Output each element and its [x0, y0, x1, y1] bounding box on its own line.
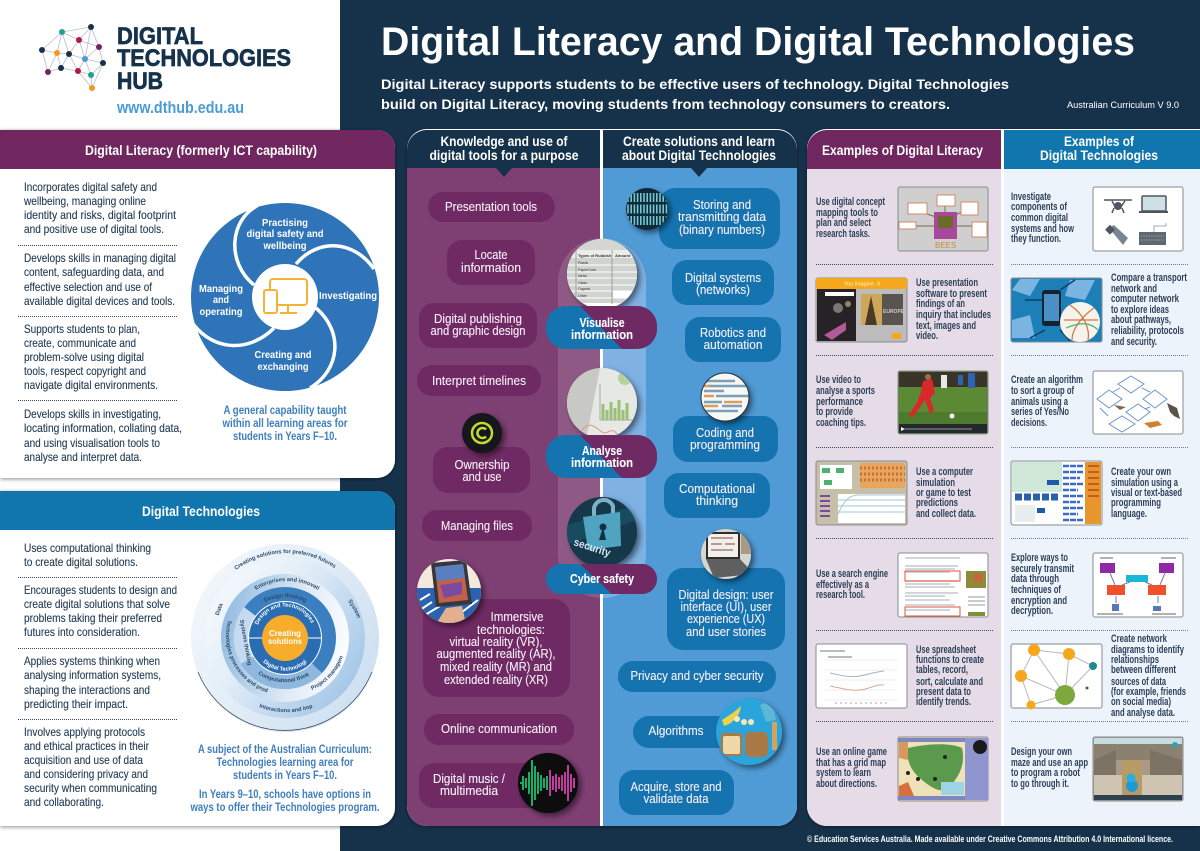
text block: digital technologies points: Encourages students to design and: [24, 583, 177, 597]
pill: Analyse information: information: [571, 456, 633, 470]
image: presentation tool: [816, 278, 907, 342]
pill: Immersive technologies: augmented reality (AR),: [436, 647, 556, 661]
pill: Analyse information: [546, 435, 657, 478]
pill: Storing and transmitting data: [659, 188, 780, 249]
heading: create solutions: [622, 133, 776, 163]
swirl labels: and: [213, 294, 229, 306]
pill: Computational thinking: thinking: [696, 494, 738, 508]
example: transport and computer networks: and security.: [1111, 336, 1157, 348]
pill: Digital publishing: Digital publishing: [434, 312, 522, 326]
pill: Digital music: multimedia: [440, 784, 498, 798]
caption: general capability: within all learning areas for: [222, 416, 348, 430]
heading: knowledge and use: Knowledge and use of: [440, 133, 568, 149]
example: robot maze: Design your own: [1011, 746, 1072, 758]
pill: Digital design: and user stories: [686, 625, 766, 639]
pill: Storing and transmitting data: transmitting data: [678, 210, 766, 224]
heading: Examples of Digital Literacy: [807, 130, 1001, 169]
ring labels: Enterprises and innovation: [254, 578, 320, 590]
swirl labels: Investigating: [319, 290, 377, 302]
pill: Computational thinking: Computational: [679, 482, 755, 496]
pill: Digital music: [419, 763, 544, 808]
pill: Robotics and automation: [685, 317, 781, 362]
text block: digital literacy points: effective selection and use of: [24, 280, 153, 294]
example: network diagrams: relationships: [1111, 654, 1159, 666]
ring labels: Digital Technologies: [263, 659, 307, 671]
pill: Ownership and use: and use: [462, 470, 502, 484]
pill: Locate information: Locate: [474, 248, 508, 262]
example: spreadsheet trends: identify trends.: [916, 696, 971, 708]
example: online grid map game: [816, 737, 988, 801]
pill: Digital systems: [672, 260, 774, 305]
example: computer simulation: simulation: [916, 477, 955, 489]
photo: spreadsheet: Glass: [578, 281, 587, 285]
text block: digital literacy points: Incorporates digital safety and: [24, 180, 157, 194]
pill: Immersive technologies: extended reality (XR): [444, 673, 548, 687]
text block: digital literacy points: identity and risks, digital footprint: [24, 208, 177, 222]
example: presentation software: text, images and: [916, 320, 976, 332]
image: bees concept map: [898, 187, 988, 251]
pill: Presentation tools: [428, 192, 555, 222]
image: search results page: [898, 553, 988, 617]
pill: Coding and programming: [673, 416, 778, 462]
example: sorting algorithm: Create an algorithm: [1011, 374, 1083, 386]
caption: subject of the Australian Curriculum: Technologies learning area for: [216, 755, 354, 769]
example: search engine: research tool.: [816, 589, 865, 601]
example: robot maze: [1011, 737, 1183, 801]
caption: subject of the Australian Curriculum: A subject of the Australian Curriculum:: [198, 742, 372, 756]
example: spreadsheet trends: sort, calculate and: [916, 676, 983, 688]
pill: Analyse information: Analyse: [582, 444, 622, 458]
example: spreadsheet trends: Use spreadsheet: [916, 644, 976, 656]
photo: source code: [701, 373, 750, 421]
photo: sound waveform: [518, 753, 578, 813]
example: sports video: coaching tips.: [816, 417, 866, 429]
photo: spreadsheet: Organic: [578, 287, 591, 291]
image: bees concept map: BEES: [935, 241, 956, 250]
logo wordmark: TECHNOLOGIES: [117, 45, 291, 72]
photo: spreadsheet: Types of Rubbish: [578, 253, 612, 258]
pill: Immersive technologies: mixed reality (MR) and: [440, 660, 552, 674]
pill: Acquire, store and validate data: Acquire, store and: [630, 780, 722, 794]
text block: digital literacy points: problem-solve using digital: [24, 350, 144, 364]
logo URL: www.dthub.edu.au: [116, 98, 244, 117]
example: network diagrams: and analyse data.: [1111, 707, 1175, 719]
image: grid map: [898, 737, 988, 801]
pill: Digital design: interface (UI), user: [680, 600, 772, 614]
image: spreadsheet line chart: [816, 644, 907, 708]
image: presentation tool: You imagine. It: [844, 282, 881, 288]
text block: digital literacy points: and positive use of digital tools.: [24, 222, 164, 236]
pill: Digital systems: Digital systems: [685, 271, 761, 285]
pill: Visualise information: [546, 306, 657, 349]
heading: create solutions: about Digital Technologies: [622, 147, 776, 163]
text block: digital literacy points: content, safeguarding data, and: [24, 265, 164, 279]
pill: Locate information: information: [461, 261, 521, 275]
example: computer simulation: predictions: [916, 497, 958, 509]
example: computer simulation: [816, 461, 976, 525]
example: concept mapping: research tasks.: [816, 228, 870, 240]
example: transport and computer networks: [1011, 272, 1187, 348]
example: computer simulation: Use a computer: [916, 466, 973, 478]
heading: Examples of Digital Technologies: Examples of: [1064, 133, 1134, 149]
pill: Robotics and automation: Robotics and: [700, 326, 766, 340]
pill: Robotics and automation: automation: [704, 338, 763, 352]
example: robot maze: to go through it.: [1011, 778, 1069, 790]
image: visual programming screen: [1011, 461, 1102, 525]
swirl labels: digital safety and: [246, 228, 324, 240]
example: encryption: securely transmit: [1011, 563, 1074, 575]
text block: digital technologies points: Applies systems thinking when: [24, 654, 160, 668]
logo wordmark: HUB: [117, 68, 163, 95]
pill: Coding and programming: programming: [690, 438, 760, 452]
example: online grid map game: system to learn: [816, 767, 871, 779]
ring labels: Technologies processes and production: [226, 620, 268, 692]
ring labels: Systems thinking: [238, 619, 252, 667]
pill: Digital publishing: [419, 303, 537, 348]
pill: Interpret timelines: [417, 365, 541, 396]
example: online grid map game: about directions.: [816, 778, 877, 790]
chart: digital literacy swirl: [191, 203, 379, 391]
text block: digital technologies points: [18, 541, 177, 809]
photo: spreadsheet: Metal: [578, 274, 587, 278]
text block: digital literacy points: [18, 180, 182, 464]
example: sorting algorithm: animals using a: [1011, 396, 1069, 408]
example: spreadsheet trends: present data to: [916, 686, 971, 698]
photo: spreadsheet: Amount: [615, 253, 631, 258]
text block: digital technologies points: Uses computational thinking: [24, 541, 151, 555]
pill: Ownership and use: [433, 447, 530, 493]
divider between columns: [600, 129, 603, 826]
photo: spreadsheet: Paper/Card: [578, 268, 596, 272]
text block: digital technologies points: analysing information systems,: [24, 668, 161, 682]
caption: subject of the Australian Curriculum: [190, 742, 380, 814]
example: digital system components: [1011, 187, 1183, 251]
example: sorting algorithm: decisions.: [1011, 417, 1047, 429]
photo: binary digits: [624, 188, 670, 230]
curriculum version note: Australian Curriculum V 9.0: [1067, 100, 1179, 110]
pill: Storing and transmitting data: Storing and: [693, 198, 751, 212]
text block: digital technologies points: shaping the interactions and: [24, 683, 150, 697]
example: encryption: techniques of: [1011, 584, 1061, 596]
icon: computer and phone: [264, 279, 307, 313]
image: simulation graphs: [816, 461, 907, 525]
example: presentation software: software to present: [916, 288, 987, 300]
pill: Managing files: Managing files: [441, 519, 513, 533]
example: presentation software: video.: [916, 330, 938, 342]
example: presentation software: findings of an: [916, 298, 965, 310]
core label: Creating solutions: [268, 628, 302, 646]
subtitle: Digital Literacy supports students to be effective users of technology. Digital Technologies: [381, 76, 1009, 92]
heading: Examples of Digital Technologies: [1004, 130, 1200, 169]
pill: Visualise information: Visualise: [580, 316, 625, 330]
example: network diagrams: between different: [1111, 664, 1176, 676]
pill: Online communication: Online communication: [441, 722, 557, 736]
panel: Digital Literacy: [0, 130, 395, 478]
example: concept mapping: Use digital concept: [816, 196, 885, 208]
example: presentation software: [816, 277, 991, 342]
text block: digital technologies points: security when communicating: [24, 781, 157, 795]
icon: network map of Australia: [39, 24, 106, 91]
pill: Algorithms: Algorithms: [648, 724, 704, 738]
example: presentation software: Use presentation: [916, 277, 978, 289]
image: soccer player video still: [898, 371, 988, 434]
text block: digital technologies points: futures into consideration.: [24, 625, 140, 639]
example: sports video: [816, 371, 988, 434]
example: encryption: Explore ways to: [1011, 552, 1068, 564]
pill: Managing files: [422, 510, 532, 541]
text block: digital literacy points: analyse and interpret data.: [24, 450, 142, 464]
text block: digital technologies points: Involves applying protocols: [24, 725, 145, 739]
swirl labels: exchanging: [258, 361, 308, 373]
example: digital system components: systems and how: [1011, 223, 1074, 235]
pill: Immersive technologies: technologies:: [477, 623, 545, 637]
title: Digital Literacy and Digital Technologies: [381, 20, 1135, 64]
swirl labels: wellbeing: [263, 240, 306, 252]
pill: Digital design: experience (UX): [687, 612, 765, 626]
photo: tablet augmented reality: [417, 559, 481, 624]
example: transport and computer networks: about pathways,: [1111, 314, 1171, 326]
pill: Digital systems: (networks): [696, 283, 750, 297]
ring labels: [215, 549, 360, 712]
text block: digital literacy points: Develops skills in investigating,: [24, 407, 161, 421]
heading: Examples of Digital Technologies: Digital Technologies: [1040, 147, 1158, 163]
swirl labels: Managing: [199, 283, 243, 295]
example: transport and computer networks: network and: [1111, 283, 1157, 295]
text block: digital technologies points: and collaborating.: [24, 795, 104, 809]
pill: Ownership and use: Ownership: [454, 458, 510, 472]
subtitle: [381, 76, 1009, 112]
pill: Digital music: Digital music /: [433, 772, 505, 786]
ring labels: Project management: [310, 656, 343, 690]
pill: Cyber safety: [546, 564, 657, 594]
text block: digital literacy points: available digital devices and tools.: [24, 294, 175, 308]
text block: digital technologies points: problems taking their preferred: [24, 611, 162, 625]
text block: digital literacy points: wellbeing, managing online: [23, 194, 146, 208]
example: concept mapping: [816, 187, 988, 251]
swirl labels: [199, 217, 377, 373]
text block: digital technologies points: to create digital solutions.: [24, 555, 138, 569]
photo: security padlock: [567, 497, 637, 567]
pill: Digital design: [667, 568, 785, 650]
photo: spreadsheet: Plastic: [578, 261, 589, 265]
pill: Visualise information: information: [571, 328, 633, 342]
column: Examples of Digital Literacy: [807, 130, 1001, 826]
example: encryption: data through: [1011, 573, 1059, 585]
logo wordmark: DIGITAL: [117, 23, 203, 50]
text block: digital technologies points: and considering privacy and: [24, 767, 148, 781]
photo: laptop: [701, 529, 754, 579]
example: computer simulation: and collect data.: [916, 508, 976, 520]
heading: create solutions: Create solutions and learn: [623, 133, 775, 149]
example: concept mapping: mapping tools to: [816, 207, 878, 219]
example: sorting algorithm: [1011, 371, 1183, 434]
panel: examples: [807, 129, 1200, 826]
example: sports video: analyse a sports: [816, 385, 875, 397]
caption: subject of the Australian Curriculum: students in Years F–10.: [233, 768, 337, 782]
heading: knowledge and use: digital tools for a purpose: [430, 147, 579, 163]
core label: Creating solutions: solutions: [268, 636, 302, 646]
photo: security padlock: security: [572, 536, 613, 560]
example: search engine: Use a search engine: [816, 568, 888, 580]
pill: Immersive technologies: [423, 599, 570, 697]
heading: Examples of Digital Literacy: Examples of Digital Literacy: [822, 142, 983, 158]
example: concept mapping: plan and select: [816, 217, 871, 229]
image: presentation tool: EUROPE: [883, 309, 905, 315]
text block: digital literacy points: tools, respect copyright and: [24, 364, 146, 378]
caption: general capability: A general capability taught: [224, 403, 346, 417]
example: online grid map game: that has a grid map: [816, 757, 886, 769]
ring labels: Design thinking: [264, 593, 306, 603]
pill: Immersive technologies: Immersive: [490, 610, 544, 624]
ring labels: Design and Technologies: [254, 602, 314, 625]
pill: Digital publishing: and graphic design: [430, 324, 526, 338]
image: drone, laptop, USB, keyboard: [1093, 187, 1183, 251]
pill: Coding and programming: Coding and: [696, 426, 754, 440]
pill: Locate information: [447, 240, 535, 285]
example: sports video: performance: [816, 396, 863, 408]
logo wordmark: [117, 23, 291, 95]
example: network diagrams: sources of data: [1111, 676, 1167, 688]
example: network diagrams: Create network: [1111, 633, 1168, 645]
caption: general capability: students in Years F–10.: [233, 429, 337, 443]
example: digital system components: common digital: [1011, 212, 1068, 224]
text block: digital technologies points: create digital solutions that solve: [24, 597, 170, 611]
heading: Digital Technologies: Digital Technologies: [142, 503, 260, 519]
heading: Digital Literacy: [0, 130, 395, 169]
pill: Storing and transmitting data: (binary numbers): [679, 223, 765, 237]
pill: Cyber safety: Cyber safety: [570, 572, 634, 586]
image: phone and transit map: [1011, 278, 1102, 342]
ring labels: Data: [215, 602, 225, 616]
photo: spreadsheet: [567, 239, 637, 309]
text block: digital literacy points: Develops skills in managing digital: [24, 251, 176, 265]
ring labels: Systems: [348, 600, 360, 618]
text block: digital literacy points: navigate digital environments.: [24, 378, 158, 392]
caption: subject of the Australian Curriculum: In Years 9–10, schools have options in: [199, 787, 371, 801]
example: spreadsheet trends: functions to create: [916, 654, 984, 666]
text block: digital literacy points: and using visualisation tools to: [24, 436, 160, 450]
swirl labels: Creating and: [254, 349, 312, 361]
example: transport and computer networks: to explore ideas: [1111, 304, 1169, 316]
text block: digital technologies points: predicting their impact.: [24, 697, 128, 711]
example: digital system components: components of: [1011, 201, 1067, 213]
chart: concentric curriculum diagram: [191, 544, 379, 732]
photo: sandwich ingredients: [716, 699, 782, 765]
image: decision flowchart: [1093, 371, 1183, 434]
text block: digital literacy points: Supports students to plan,: [24, 322, 140, 336]
image: robot in a maze: [1093, 737, 1183, 801]
example: network diagrams: [1011, 633, 1186, 719]
column divider: [1001, 130, 1004, 826]
example: create a simulation: programming: [1111, 497, 1161, 509]
text block: digital literacy points: create, communicate and: [24, 336, 136, 350]
swirl labels: Practising: [262, 217, 308, 229]
example: encryption: decryption.: [1011, 605, 1053, 617]
example: sorting algorithm: series of Yes/No: [1011, 406, 1069, 418]
ring labels: Interactions and impact: [259, 704, 312, 712]
example: online grid map game: Use an online game: [816, 746, 887, 758]
swirl labels: operating: [200, 306, 242, 318]
example: network diagrams: on social media): [1111, 696, 1171, 708]
image: encryption flow diagram: [1093, 553, 1183, 617]
heading: knowledge and use: [430, 133, 579, 163]
example: spreadsheet trends: [816, 644, 984, 708]
example: sorting algorithm: to sort a group of: [1011, 385, 1074, 397]
text block: digital literacy points: locating information, collating data,: [24, 421, 182, 435]
core label: Creating solutions: Creating: [269, 628, 301, 638]
pill: Privacy and cyber security: Privacy and cyber security: [630, 669, 764, 683]
pill: Online communication: [424, 714, 574, 745]
ring labels: Computational thinking: [258, 671, 310, 682]
example: encryption: encryption and: [1011, 595, 1067, 607]
pill: Privacy and cyber security: [618, 661, 776, 692]
text block: digital technologies points: and ethical practices in their: [24, 739, 149, 753]
text block: digital technologies points: acquisition and use of data: [24, 753, 143, 767]
example: encryption: [1011, 552, 1183, 617]
pill: Acquire, store and validate data: validate data: [644, 792, 709, 806]
photo: bar chart: [567, 368, 637, 440]
image: friends network graph: [1011, 644, 1102, 710]
pill: Algorithms: [633, 716, 733, 748]
example: robot maze: to program a robot: [1011, 767, 1080, 779]
pill: Computational thinking: [664, 473, 770, 518]
example: digital system components: Investigate: [1011, 191, 1051, 203]
caption: subject of the Australian Curriculum: ways to offer their Technologies program.: [190, 800, 380, 814]
pill: Immersive technologies: virtual reality (VR),: [450, 635, 542, 649]
example: create a simulation: language.: [1111, 508, 1147, 520]
example: sports video: Use video to: [816, 374, 861, 386]
pill: Interpret timelines: Interpret timelines: [432, 374, 526, 388]
example: presentation software: inquiry that includes: [916, 309, 991, 321]
column: Examples of Digital Technologies: [1004, 130, 1200, 826]
example: computer simulation: or game to test: [916, 487, 971, 499]
ring labels: Creating solutions for preferred futures: [234, 549, 336, 570]
subtitle: build on Digital Literacy, moving students from technology consumers to creators.: [381, 96, 950, 112]
example: create a simulation: [1011, 461, 1182, 525]
example: robot maze: maze and use an app: [1011, 757, 1088, 769]
caption: general capability: [222, 403, 348, 443]
example: spreadsheet trends: tables, record,: [916, 664, 968, 676]
icon: copyright symbol: [462, 413, 502, 453]
example: sports video: to provide: [816, 406, 853, 418]
pill: Presentation tools: Presentation tools: [445, 200, 537, 214]
example: create a simulation: Create your own: [1111, 466, 1171, 478]
example: search engine: effectively as a: [816, 579, 870, 591]
panel: Digital Technologies: [0, 489, 396, 830]
example: search engine: [816, 553, 988, 617]
heading: Digital Literacy: Digital Literacy (formerly ICT capability): [85, 142, 317, 158]
pill: Acquire, store and validate data: [619, 770, 734, 815]
heading: Digital Technologies: [0, 491, 395, 530]
photo: spreadsheet: Other: [578, 294, 588, 298]
pill: Digital design: Digital design: user: [678, 588, 774, 602]
panel: knowledge and create columns: [407, 129, 797, 826]
logo: Digital Technologies Hub: [39, 23, 291, 117]
example: digital system components: they function.: [1011, 233, 1061, 245]
